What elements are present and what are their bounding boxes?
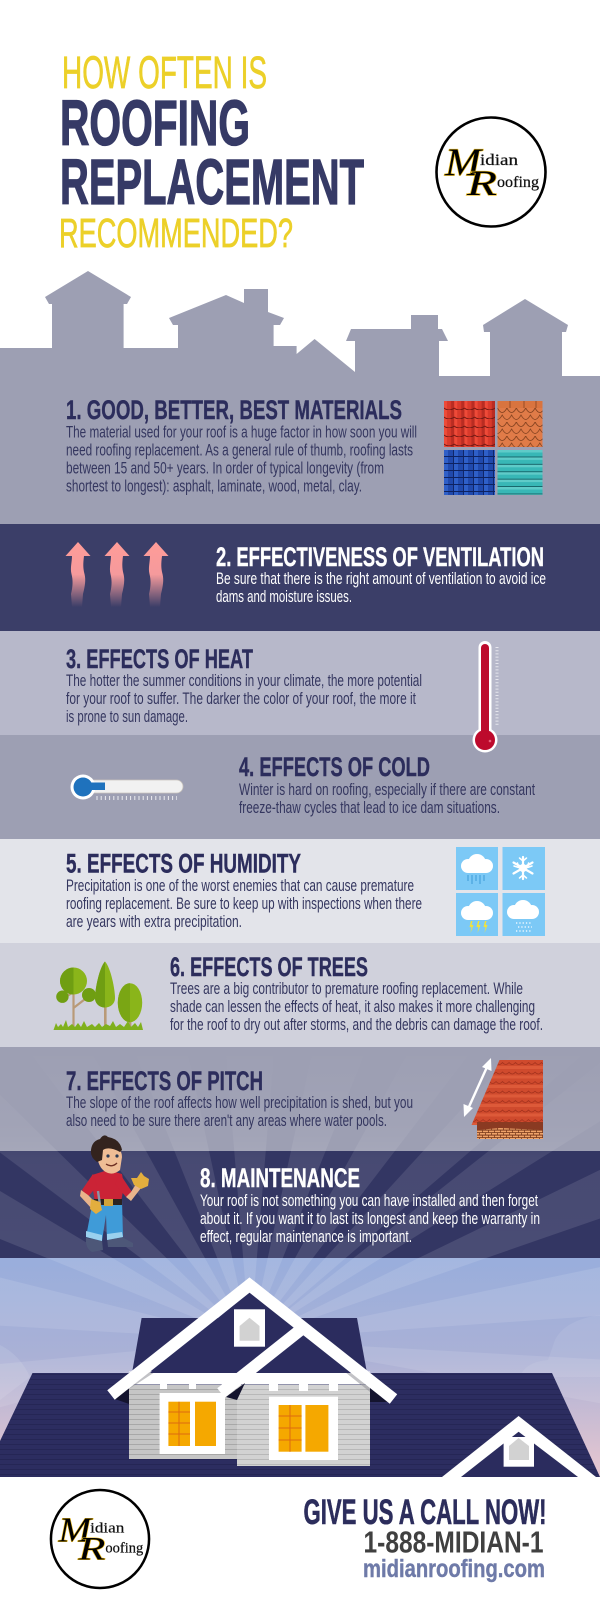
footer [0, 1477, 600, 1601]
text block 3 [66, 671, 422, 726]
frieze shadow [129, 1372, 370, 1392]
icon: roofer mascot [80, 1135, 149, 1252]
panel: 5 effects of humidity [0, 839, 600, 943]
gloves [90, 1199, 102, 1214]
head [97, 1146, 122, 1174]
right window [269, 1397, 338, 1460]
sunburst rays [0, 1151, 600, 1365]
panel: 7 effects of pitch [66, 1058, 543, 1139]
text block 5: roofing replacement. Be sure to keep up with inspections when there [66, 894, 422, 913]
panel: 3 effects of heat [0, 631, 600, 735]
heading 8: 8. MAINTENANCE [200, 1163, 360, 1193]
icon: hot thermometer [472, 641, 498, 752]
eyes and mouth [106, 1154, 110, 1158]
logo: Midian Roofing header [436, 118, 546, 226]
band backgrounds: pitch, maintenance and sky [0, 1047, 600, 1477]
text block 7: also need to be sure there aren't any areas where water pools. [66, 1111, 387, 1130]
heading 3: 3. EFFECTS OF HEAT [66, 644, 253, 674]
icon: roofing material swatches [444, 401, 542, 495]
title: RECOMMENDED? [59, 210, 293, 256]
wrench [98, 1191, 100, 1205]
text block 3: for your roof to suffer. The darker the color of your roof, the more it [66, 689, 416, 708]
text block 8: effect, regular maintenance is important. [200, 1227, 412, 1246]
left wall [129, 1385, 237, 1459]
icon: pitched roof with arrow [464, 1058, 543, 1139]
text block 3: is prone to sun damage. [66, 707, 188, 726]
panel: 1 good better best materials [0, 380, 600, 524]
text block 5: are years with extra precipitation. [66, 912, 242, 931]
illustration: house with sky [0, 1285, 600, 1477]
gable trim [111, 1285, 394, 1399]
title: HOW OFTEN IS [62, 47, 267, 98]
text block 2 [216, 569, 546, 606]
hair [91, 1135, 122, 1162]
text block 8 [200, 1191, 540, 1246]
heading 7: 7. EFFECTS OF PITCH [66, 1066, 263, 1096]
text block 7 [66, 1093, 413, 1130]
logo: Midian Roofing header: oofing [497, 174, 539, 191]
text block 1 [66, 422, 417, 496]
text block 3: The hotter the summer conditions in your climate, the more potential [66, 671, 422, 690]
logo: Midian Roofing header: R [466, 163, 497, 203]
logo: Midian Roofing footer: idian [90, 1521, 124, 1537]
upper roof [132, 1318, 367, 1373]
text block 7: The slope of the roof affects how well precipitation is shed, but you [66, 1093, 413, 1112]
panel: 4 effects of cold [0, 735, 600, 839]
heading 6: 6. EFFECTS OF TREES [170, 952, 368, 982]
boots [86, 1238, 103, 1252]
text block 1: need roofing replacement. As a general rule of thumb, roofing lasts [66, 440, 413, 460]
heading 5: 5. EFFECTS OF HUMIDITY [66, 848, 301, 878]
logo: Midian Roofing footer: M [57, 1511, 93, 1550]
left window [160, 1393, 225, 1454]
skyline of houses [0, 271, 600, 524]
panel: 2 effectiveness of ventilation [0, 524, 600, 631]
text block 5 [66, 876, 422, 931]
icon: weather tiles [456, 847, 545, 936]
text block 6 [170, 979, 543, 1034]
faint clouds left [0, 1345, 30, 1400]
upper gable [150, 1292, 352, 1373]
main roof [0, 1373, 600, 1477]
text block 1: The material used for your roof is a huge factor in how soon you will [66, 422, 417, 442]
eave shadows [115, 1383, 390, 1404]
panel: 8 maintenance [80, 1135, 540, 1252]
text block 2: dams and moisture issues. [216, 587, 352, 606]
logo: Midian Roofing header: M [444, 141, 484, 184]
text block 1: shortest to longest): asphalt, laminate, wood, metal, clay. [66, 476, 362, 496]
title [59, 47, 364, 256]
right wall [237, 1385, 370, 1466]
shirt and arms [92, 1170, 124, 1202]
logo: Midian Roofing header: idian [480, 152, 518, 169]
panel: 6 effects of trees [0, 943, 600, 1047]
heading 4: 4. EFFECTS OF COLD [239, 752, 430, 782]
frieze [129, 1372, 370, 1391]
icon: rising heat arrows [66, 542, 168, 607]
icon: cold thermometer [70, 774, 183, 800]
logo: Midian Roofing footer [51, 1490, 149, 1588]
text block 5: Precipitation is one of the worst enemies that can cause premature [66, 876, 414, 895]
logo: Midian Roofing footer: R [77, 1532, 106, 1568]
title: REPLACEMENT [60, 146, 364, 218]
icon: trees [54, 962, 143, 1030]
text block 4 [239, 780, 535, 817]
title: ROOFING [60, 87, 250, 159]
small dormer [442, 1416, 596, 1477]
website: midianroofing.com [363, 1555, 545, 1583]
faint clouds [520, 1315, 600, 1377]
jeans [86, 1200, 123, 1241]
phone number: 1-888-MIDIAN-1 [364, 1525, 544, 1560]
attic window [234, 1309, 265, 1347]
text block 1: between 15 and 50+ years. In order of typical longevity (from [66, 458, 384, 478]
belt [94, 1199, 122, 1205]
heading 1: 1. GOOD, BETTER, BEST MATERIALS [66, 395, 402, 425]
logo: Midian Roofing footer: oofing [105, 1540, 143, 1556]
